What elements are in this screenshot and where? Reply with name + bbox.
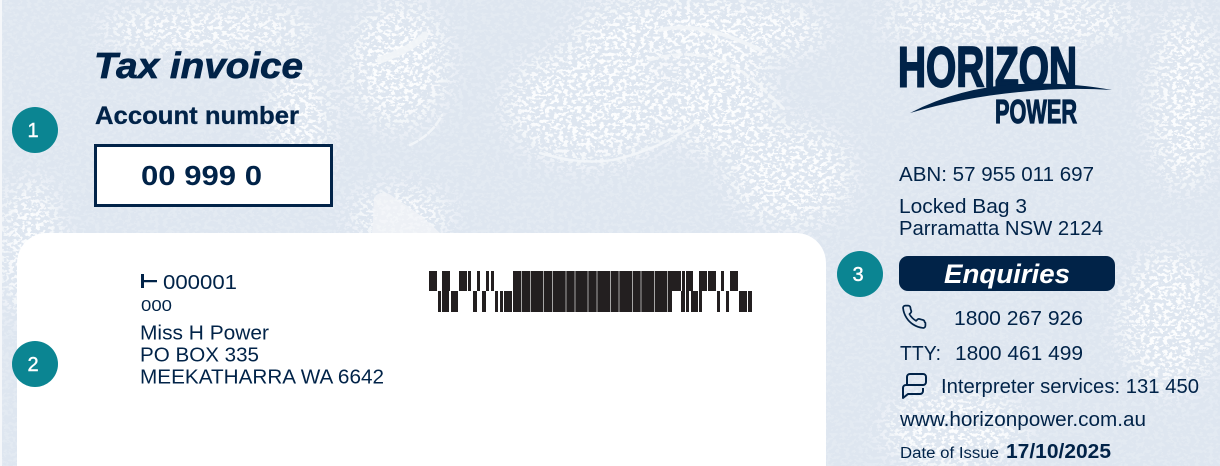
icon: chat bubbles	[903, 374, 926, 398]
step badge 1	[12, 107, 58, 153]
sub code: 000	[141, 298, 172, 315]
addressee: Miss H Power	[140, 322, 269, 344]
step badge 2	[12, 341, 58, 387]
ABN: ABN: 57 955 011 697	[899, 164, 1094, 186]
TTY number	[900, 343, 1083, 365]
account number box	[96, 146, 332, 206]
postal address: Locked Bag 3	[899, 196, 1027, 218]
logo: Horizon Power	[898, 36, 1112, 130]
title: Tax invoice	[94, 45, 303, 86]
date of issue: 17/10/2025	[1006, 441, 1111, 463]
icon: phone	[903, 306, 925, 328]
enquiries heading bar	[899, 256, 1115, 291]
sort mark	[141, 274, 157, 288]
step badge 3: 3	[852, 264, 864, 286]
barcode	[429, 271, 752, 312]
address line: PO BOX 335	[140, 344, 259, 366]
logo: Horizon Power: HORIZON	[898, 36, 1077, 100]
step badge 2: 2	[27, 354, 39, 376]
logo: Horizon Power: POWER	[995, 93, 1077, 130]
step badge 1: 1	[27, 120, 39, 142]
date of issue: Date of Issue	[900, 445, 999, 462]
interpreter services: Interpreter services: 131 450	[941, 376, 1199, 398]
enquiries heading bar: Enquiries	[944, 259, 1070, 289]
account number box: 00 999 0	[141, 160, 262, 191]
panel: address	[17, 233, 826, 466]
TTY number: TTY:	[900, 343, 941, 365]
phone number: 1800 267 926	[954, 308, 1083, 330]
TTY number: 1800 461 499	[955, 343, 1083, 365]
heading: account number: Account number	[95, 102, 299, 130]
sequence number: 000001	[163, 272, 237, 294]
suburb line: MEEKATHARRA WA 6642	[140, 366, 384, 388]
step badge 3	[837, 251, 883, 297]
date of issue	[900, 441, 1111, 463]
postal address: Parramatta NSW 2124	[899, 218, 1103, 240]
website: www.horizonpower.com.au	[899, 409, 1146, 431]
postal address	[899, 196, 1103, 240]
